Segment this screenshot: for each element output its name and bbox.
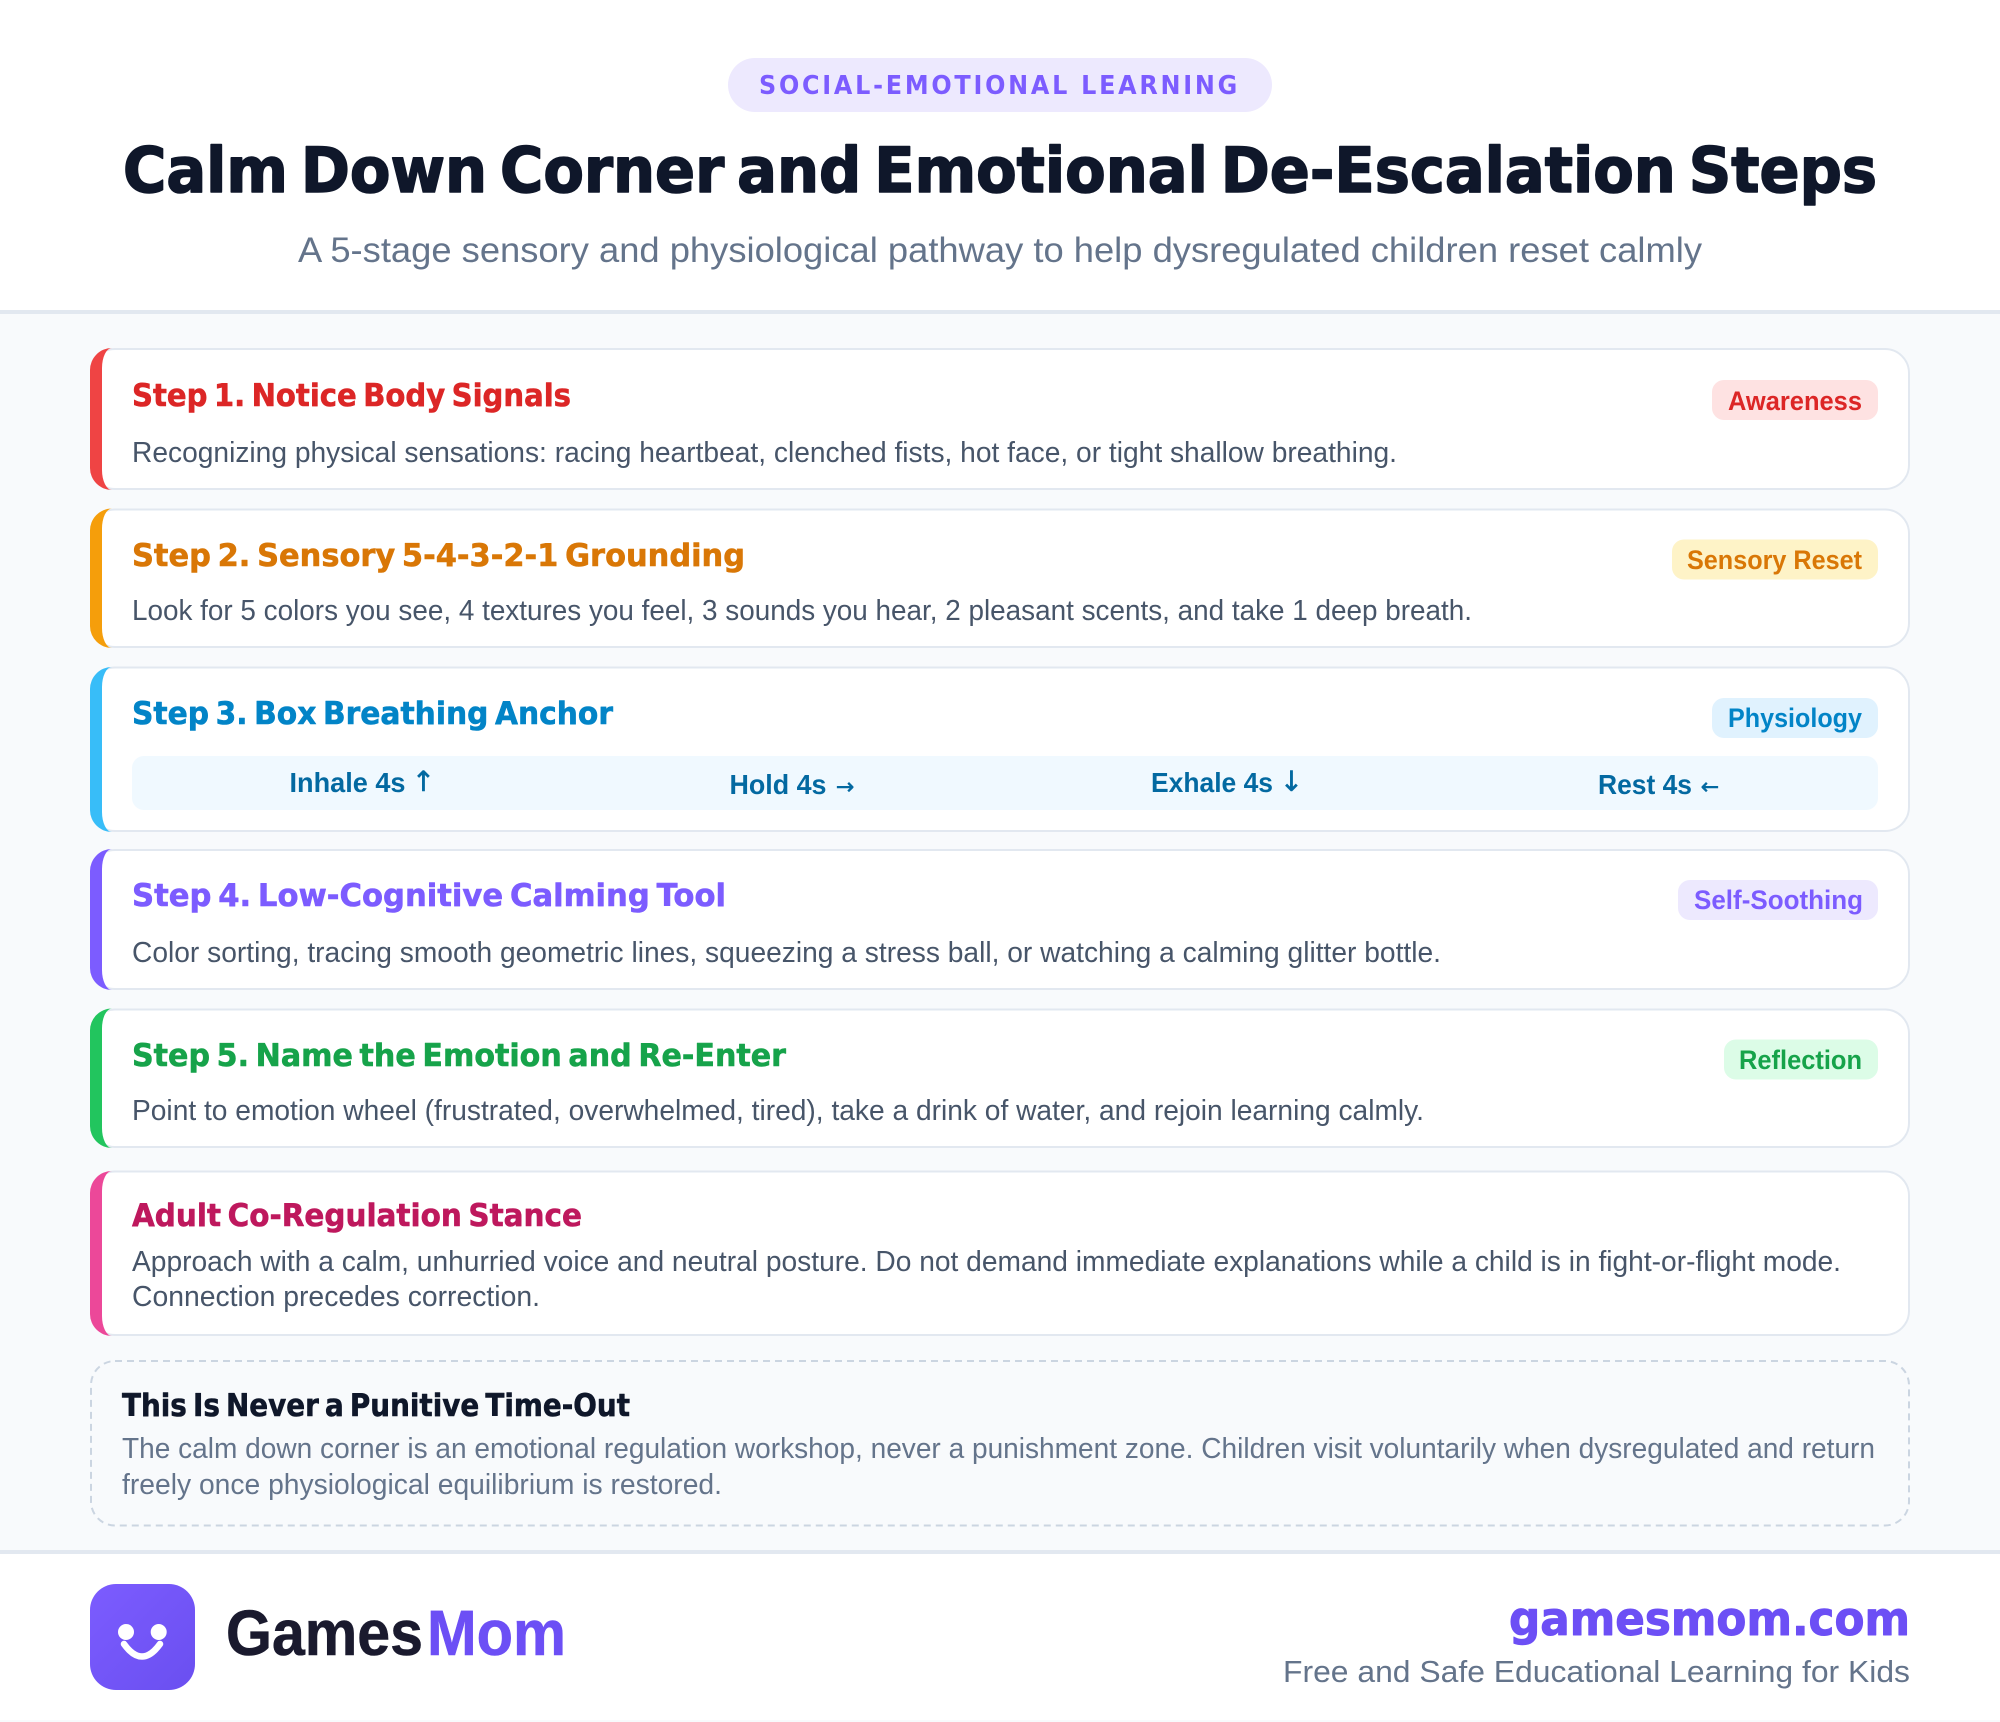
note description: The calm down corner is an emotional regulation workshop, never a punishment zone. Children visit voluntarily when dysregulated and return [122,1433,1875,1465]
step 2 description: Look for 5 colors you see, 4 textures you feel, 3 sounds you hear, 2 pleasant scents, and take 1 deep breath. [132,595,1472,627]
hold label: → [836,775,854,800]
note description [122,1433,1875,1501]
tag: self-soothing [1678,880,1878,920]
tag: reflection [1724,1040,1878,1080]
inhale label: Inhale 4s [290,767,406,798]
step 5 heading: Step 5. Name the Emotion and Re-Enter [132,1038,786,1074]
panel: step 1 [90,348,1909,490]
footer [0,1550,2000,1720]
brand name: Games [226,1597,423,1669]
step 2 heading: Step 2. Sensory 5-4-3-2-1 Grounding [132,538,745,574]
adult description [132,1246,1841,1313]
brand name [226,1597,566,1669]
adult heading: Adult Co-Regulation Stance [132,1198,582,1234]
adult description: Approach with a calm, unhurried voice and neutral posture. Do not demand immediate explanations while a child is in fight-or-flight mode. [132,1246,1841,1278]
adult description: Connection precedes correction. [132,1281,540,1313]
tag: self-soothing: Self-Soothing [1694,885,1863,915]
panel: adult co-regulation stance [90,1171,1909,1336]
eyebrow pill: SOCIAL-EMOTIONAL LEARNING [759,71,1240,101]
step 1 heading: Step 1. Notice Body Signals [132,378,571,414]
tag: awareness [1712,380,1878,420]
panel: never a punitive time-out note [91,1361,1909,1526]
note heading: This Is Never a Punitive Time-Out [122,1388,630,1424]
tag: sensory reset [1672,540,1878,580]
icon: GamesMom smiley logo [90,1584,195,1690]
step 4 description: Color sorting, tracing smooth geometric lines, squeezing a stress ball, or watching a calming glitter bottle. [132,937,1441,969]
tag: sensory reset: Sensory Reset [1687,545,1862,575]
rest label: Rest 4s [1598,769,1692,800]
tag: awareness: Awareness [1728,386,1862,416]
tag: physiology [1712,698,1878,738]
exhale label: ↓ [1280,765,1303,798]
box breathing strip [132,756,1878,810]
rest label: ← [1701,775,1719,800]
eyebrow pill [728,58,1272,112]
tag: reflection: Reflection [1739,1045,1862,1075]
panel: step 2 [90,508,1909,648]
step 5 description: Point to emotion wheel (frustrated, overwhelmed, tired), take a drink of water, and rejoin learning calmly. [132,1095,1424,1127]
panel: step 4 [90,849,1909,990]
hold label: Hold 4s [730,769,826,800]
step 3 heading: Step 3. Box Breathing Anchor [132,696,613,732]
step 1 description: Recognizing physical sensations: racing heartbeat, clenched fists, hot face, or tight shallow breathing. [132,437,1397,469]
brand name: Mom [427,1597,566,1669]
exhale label: Exhale 4s [1151,767,1273,798]
panel: step 5 [90,1008,1909,1148]
inhale label: ↑ [412,765,435,798]
panel: step 3 [90,667,1909,832]
header [0,0,2000,314]
tag: physiology: Physiology [1728,703,1862,733]
note description: freely once physiological equilibrium is restored. [122,1469,722,1501]
website url: gamesmom.com [1509,1592,1910,1646]
tagline: Free and Safe Educational Learning for Kids [1283,1654,1910,1689]
subtitle: A 5-stage sensory and physiological pathway to help dysregulated children reset calmly [298,231,1703,270]
step 4 heading: Step 4. Low-Cognitive Calming Tool [132,878,726,914]
title: Calm Down Corner and Emotional De-Escalation Steps [123,134,1877,207]
